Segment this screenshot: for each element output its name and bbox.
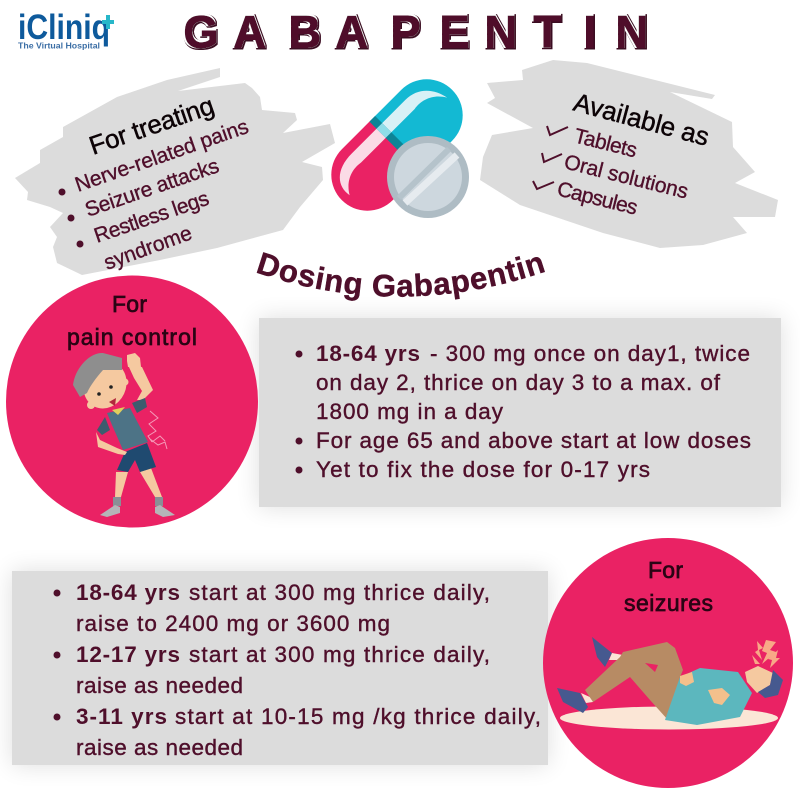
list: seizure doses: 12-17 yrs xyxy=(76,642,180,667)
list: seizure doses: start at 300 mg thrice daily, xyxy=(189,580,490,605)
list: pain control doses: on day 2, thrice on day 3 to a max. of xyxy=(316,370,721,395)
panel: seizure dosing xyxy=(12,571,548,765)
list: pain control doses: Yet to fix the dose for 0-17 yrs xyxy=(316,457,650,482)
label: for seizures: For xyxy=(648,557,683,583)
icon: elderly man with back pain xyxy=(73,353,175,517)
list: seizure doses xyxy=(54,580,541,760)
label: for pain control: For xyxy=(112,291,147,317)
list: conditions treated: Seizure attacks xyxy=(82,154,222,222)
list: seizure doses: raise as needed xyxy=(76,673,243,698)
icon: capsule and tablet xyxy=(316,64,478,226)
logo: iCliniq: The Virtual Hospital xyxy=(18,42,100,50)
icon: person having a seizure xyxy=(557,637,783,730)
list: conditions treated: syndrome xyxy=(101,222,195,275)
checklist: forms: Capsules xyxy=(555,178,640,220)
label: for pain control: pain control xyxy=(67,324,197,350)
list: seizure doses: start at 10-15 mg /kg thrice daily, xyxy=(175,704,541,729)
list: seizure doses: 18-64 yrs xyxy=(76,580,180,605)
label: for seizures: seizures xyxy=(624,590,713,616)
heading: for treating: For treating xyxy=(85,90,218,161)
circle: for seizures xyxy=(543,538,793,788)
list: conditions treated xyxy=(58,115,252,275)
list: conditions treated: Nerve-related pains xyxy=(72,115,252,197)
brush stroke background: right xyxy=(480,60,778,248)
brush stroke background: left xyxy=(15,68,335,275)
list: pain control doses: 1800 mg in a day xyxy=(316,399,504,424)
panel: for treating xyxy=(15,68,335,275)
list: pain control doses: For age 65 and above start at low doses xyxy=(316,428,751,453)
panel: pain control dosing xyxy=(259,318,781,507)
panel: available as xyxy=(480,60,778,248)
list: seizure doses: raise to 2400 mg or 3600 mg xyxy=(76,611,390,636)
checklist: forms: Tablets xyxy=(572,125,639,162)
list: seizure doses: raise as needed xyxy=(76,735,243,760)
heading: dosing gabapentin: Dosing Gabapentin xyxy=(256,252,545,301)
list: pain control doses: - 300 mg once on day1, twice xyxy=(430,341,750,366)
list: pain control doses: 18-64 yrs xyxy=(316,341,420,366)
logo: iCliniq: iCliniq xyxy=(18,8,110,47)
title: GABAPENTIN xyxy=(183,6,648,57)
checklist: forms xyxy=(533,125,691,220)
list: pain control doses xyxy=(296,341,751,482)
circle: for pain control xyxy=(6,276,258,528)
heading: available as: Available as xyxy=(570,87,712,152)
checklist: forms: Oral solutions xyxy=(562,151,691,204)
list: seizure doses: start at 300 mg thrice daily, xyxy=(189,642,490,667)
list: seizure doses: 3-11 yrs xyxy=(76,704,167,729)
list: conditions treated: Restless legs xyxy=(91,187,212,248)
label: for seizures xyxy=(624,557,713,616)
label: for pain control xyxy=(67,291,197,350)
